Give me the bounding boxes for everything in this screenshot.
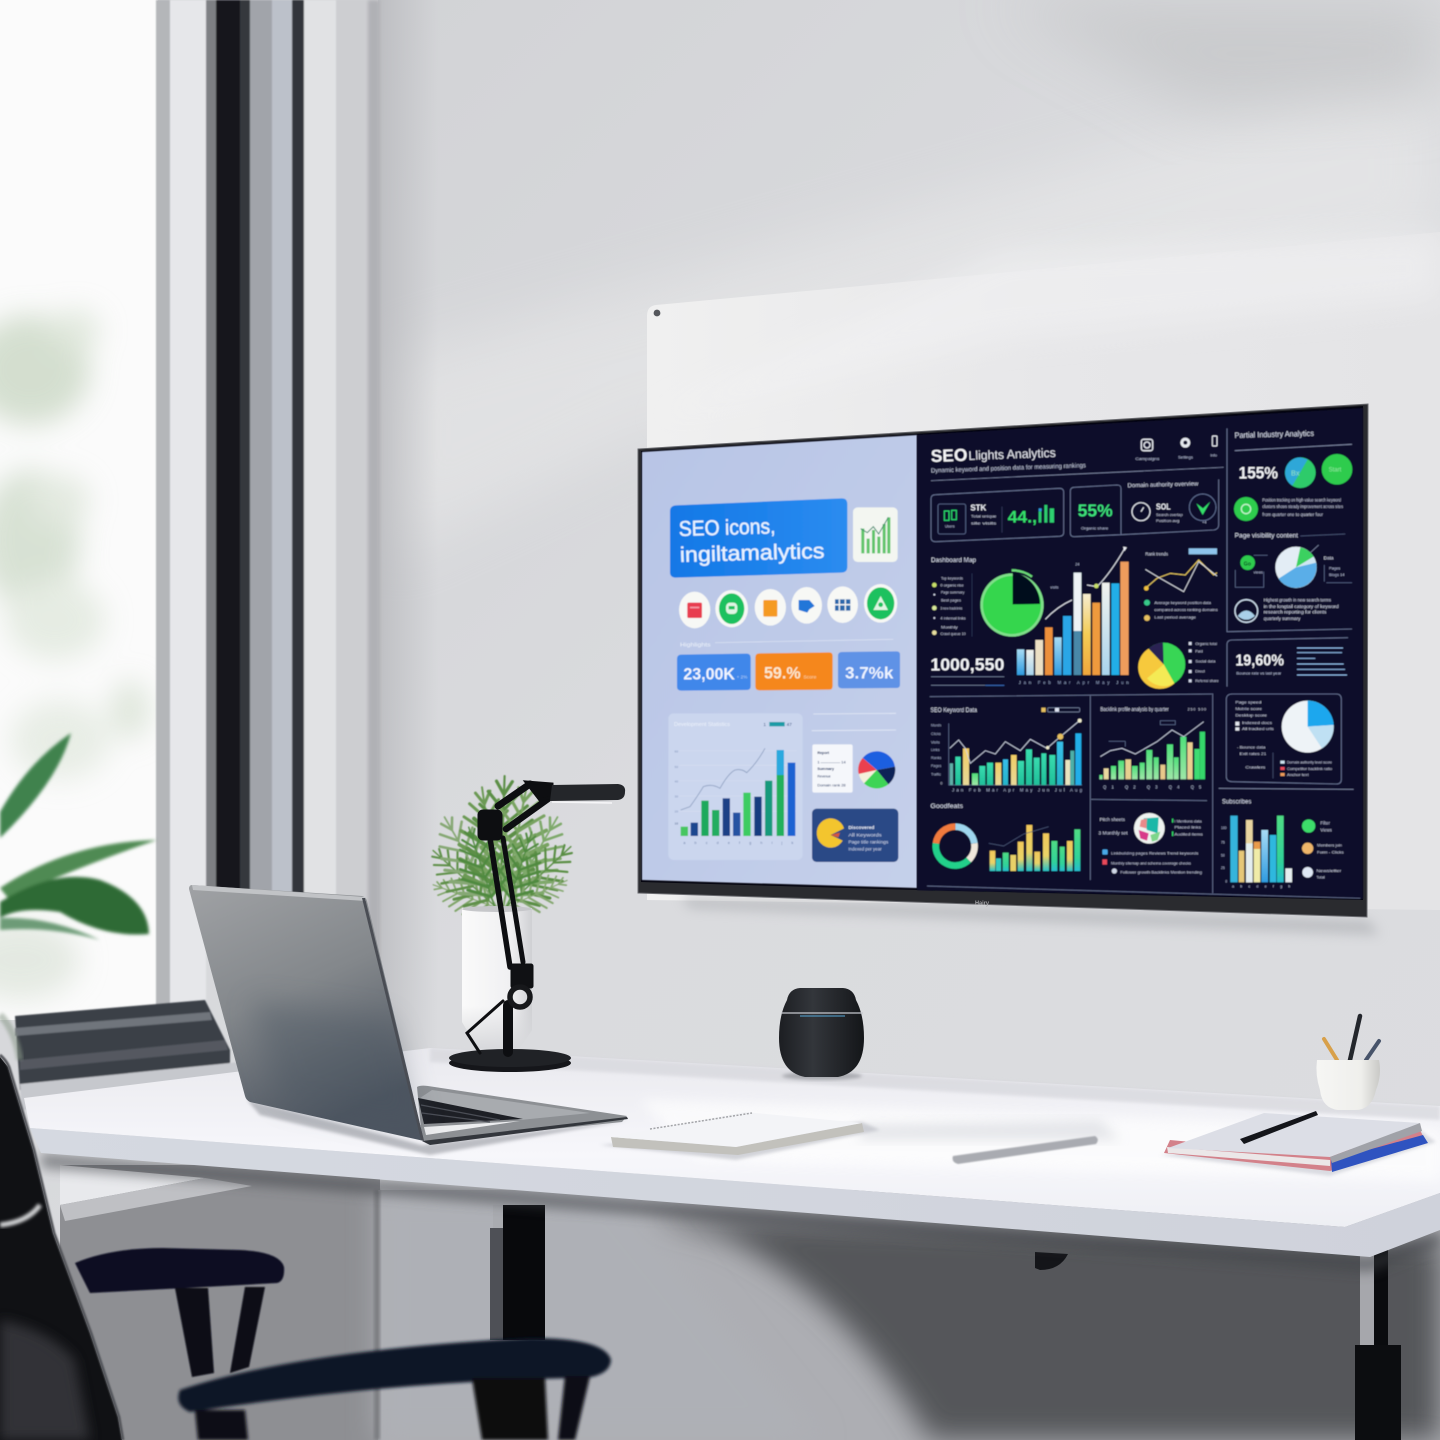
multi-colour pie chart [858, 751, 895, 788]
pencil cup [1316, 1016, 1380, 1110]
chart one axis labels: 0 [940, 782, 942, 786]
metric box: percent: 55% [1078, 501, 1113, 521]
chart one bars [950, 733, 1081, 785]
chart one axis labels: Clicks [931, 732, 941, 736]
icon: blue arrow [791, 587, 822, 624]
dark panel lower section [927, 693, 1360, 898]
separator lines [812, 713, 896, 731]
large total: 1000,550 [930, 655, 1004, 675]
pen on desk [953, 1136, 1098, 1164]
icon: gear: Settings [1178, 454, 1193, 459]
title line two: ingiltamalytics [679, 539, 825, 567]
metric box: users: Users [945, 524, 955, 528]
pie card: Exit rates 21 [1240, 751, 1267, 756]
dark panel lower section: 250 500 [1188, 708, 1206, 712]
green icon with text: clusters shows steady improvement across sites [1262, 504, 1343, 509]
desk [24, 1048, 1440, 1272]
pie card legend [1280, 761, 1285, 764]
line chart [1144, 548, 1218, 621]
pie card: Indexed docs [1242, 720, 1272, 725]
pie chart [1275, 545, 1319, 588]
left list with pie: visits [1050, 586, 1059, 590]
list legend: 4 internal links [940, 616, 966, 620]
bar chart trend line [1045, 547, 1125, 619]
chart one axis labels: Traffic [931, 773, 941, 777]
ring icon with text [1235, 597, 1339, 622]
green dot with bracket: views [1254, 570, 1263, 574]
yellow and green pie chart [1138, 642, 1219, 689]
icon: colour circle [1134, 813, 1165, 844]
monitor bezel [638, 404, 1368, 917]
KPI card orange: Score [803, 674, 817, 680]
subscribers bars: 0 [1225, 879, 1227, 883]
chart one x labels: Jan Feb Mar Apr May Jun Jul Aug [952, 787, 1083, 792]
list legend: Top keywords [941, 576, 963, 580]
KPI card blue: + 2% [737, 674, 747, 679]
KPI card orange: 59.% [764, 664, 801, 683]
ring icon with text: Highest growth in new search terms [1264, 597, 1331, 602]
pie legend: Paid [1195, 649, 1203, 653]
KPI card light blue [838, 651, 900, 688]
subscribers bars: 100 [1221, 826, 1227, 830]
left light panel [642, 435, 917, 888]
section heading: Dashboard Map [931, 557, 976, 564]
metric box: percent: Organic share [1081, 526, 1108, 530]
large total [930, 655, 1004, 685]
subscribers legend: Form - Clicks [1317, 849, 1344, 854]
speaker [779, 988, 864, 1080]
chair rear armrest [75, 1248, 284, 1377]
plant [418, 775, 587, 925]
green icon with text: from quarter one to quarter four [1262, 512, 1324, 517]
subscribers legend: Total [1316, 874, 1325, 879]
centre circle with list: 3 Monthly set [1098, 830, 1129, 835]
dashboard title: Llights Analytics [968, 446, 1056, 463]
chart two x labels: Q1 Q2 Q3 Q4 Q5 [1103, 785, 1202, 790]
mini list card [812, 744, 853, 793]
right column heading: Partial Industry Analytics [1234, 429, 1314, 440]
bar chart labels: Jan Feb Mar Apr May Jun [1019, 680, 1129, 685]
dashboard title: SEO [930, 445, 968, 466]
desk front edge [30, 1128, 1440, 1257]
pie legend [1324, 555, 1352, 583]
line chart: Average keyword position data [1154, 600, 1212, 605]
mini list card: Report [817, 751, 830, 755]
list legend: Best pages [941, 599, 961, 603]
line chart: Rank trends [1145, 552, 1168, 557]
large percentage: 155% [1239, 464, 1278, 483]
donut chart [936, 827, 975, 866]
title line one: SEO icons, [678, 514, 776, 541]
mini list card: 1 ————— 14 [817, 760, 846, 764]
green icon with text [1234, 497, 1343, 521]
navy summary card: All Keywords [848, 832, 882, 837]
subscribers legend: Views [1320, 827, 1332, 832]
title card [670, 498, 847, 578]
desk shadow [41, 1153, 1440, 1272]
chart card: 40 [675, 780, 678, 784]
chart icon card [853, 507, 898, 562]
pie legend: Social data [1195, 660, 1216, 664]
circle badge green: Start [1329, 467, 1342, 473]
list legend [932, 576, 966, 636]
navy summary card: Page title rankings [848, 840, 888, 845]
centre circle with list: I Mentions data [1174, 818, 1202, 823]
monitor shadow [680, 897, 1380, 935]
pie legend: Data [1324, 555, 1334, 560]
dashboard title [930, 445, 1086, 475]
subscribers bars [1221, 816, 1292, 888]
pale pie chart [1282, 701, 1334, 753]
chart one axis labels: Month [931, 724, 941, 728]
green dot with bracket [1235, 555, 1268, 587]
icon: green circle [715, 590, 748, 627]
chart one axis labels: Pages [931, 764, 942, 768]
laptop keyboard [418, 1098, 523, 1124]
icon: green letter [864, 584, 897, 623]
right dark panel [917, 408, 1363, 899]
metric box: users [931, 488, 1064, 542]
navy summary card: Discovered [848, 825, 874, 831]
x axis labels: a b c d e f g h i j k [683, 841, 794, 845]
icon: phone: Info [1210, 453, 1218, 458]
mini list card: Revenue [817, 774, 831, 778]
chart card: 50 [675, 765, 678, 769]
metrics label: Highlights [680, 643, 711, 649]
plant pot [462, 906, 532, 1048]
list legend: Monthly [941, 625, 958, 629]
subscribers legend [1302, 819, 1344, 879]
metric box: 19,60% [1227, 638, 1348, 687]
chart card: 30 [675, 794, 678, 798]
board pin [654, 310, 660, 316]
chart one axis labels [931, 723, 1082, 786]
metric box: score: SOL [1156, 502, 1171, 511]
chart two trend line [1100, 721, 1204, 757]
laptop shadow [247, 1100, 630, 1155]
icon: orange file [755, 589, 786, 626]
notebook on desk [600, 1112, 880, 1160]
under-desk bracket [1035, 1252, 1068, 1270]
list legend: Crawl queue 10 [940, 632, 966, 636]
metric box: score: Domain authority overview [1128, 481, 1199, 489]
pie card [1226, 694, 1341, 784]
icon: red badge [679, 592, 710, 628]
centre circle with list: Follower growth Backlinks Mention trending [1120, 870, 1202, 875]
window with blurred foliage [0, 0, 158, 1020]
green pie chart [980, 570, 1044, 637]
cup [1316, 1060, 1380, 1110]
metric box: score: Search overlap [1156, 513, 1183, 517]
centre circle with list: Monthly sitemap and schema coverage checks [1111, 860, 1191, 865]
right desk leg [1355, 1250, 1401, 1440]
chart card: 10 [675, 822, 678, 826]
monitor brand label: Hairy [975, 901, 990, 907]
subscribers bars: 50 [1221, 854, 1225, 858]
chair front armrest [178, 1338, 611, 1440]
left desk leg [490, 1205, 545, 1340]
green mini chart: 44., [1008, 508, 1037, 527]
subscribers bars: 75 [1221, 840, 1225, 844]
chart card [668, 713, 803, 860]
pie legend [1189, 642, 1219, 683]
navy summary card [812, 809, 898, 862]
line chart: Last period average [1154, 615, 1197, 620]
line chart: compared across ranking domains [1154, 607, 1218, 612]
metric box: score: +4 [1202, 519, 1207, 524]
chart card heading: Development Statistics [674, 722, 730, 728]
line chart legend [1144, 600, 1150, 606]
monitor [638, 404, 1368, 917]
centre circle with list: Audited items [1174, 832, 1203, 837]
chart two heading: Backlink profile analysis by quarter [1100, 707, 1169, 713]
lamp arm [467, 782, 552, 1053]
circle badge green [1322, 454, 1352, 485]
mounting board [647, 232, 1440, 910]
pie card text: Page speed [1235, 700, 1261, 705]
subscribers bars: a b c d e f g h [1232, 884, 1290, 888]
subscribers legend: Members join [1317, 843, 1342, 848]
laptop [189, 885, 630, 1155]
pen on notebook [1240, 1111, 1318, 1144]
laptop lid [189, 885, 424, 1141]
metric box: 19,60%: Bounce rate vs last year [1236, 671, 1282, 676]
dashboard subtitle: Dynamic keyword and position data for measuring rankings [931, 462, 1086, 475]
icon row [679, 584, 897, 628]
pie card: Anchor text [1287, 773, 1309, 777]
yellow and cyan bars [989, 825, 1080, 871]
bar chart [681, 750, 795, 836]
window sill [15, 1000, 240, 1110]
header icons [1135, 436, 1218, 461]
ring icon with text: in the longtail category of keyword [1264, 604, 1339, 609]
subscribers bars: 25 [1221, 866, 1225, 870]
main bar chart [1017, 547, 1129, 685]
yellow pie icon [817, 818, 844, 848]
pie card: All tracked urls [1242, 726, 1274, 731]
list legend: 3 new backlinks [940, 606, 962, 610]
chart one axis labels: Visits [931, 740, 940, 744]
icon: camera: Campaigns [1135, 456, 1159, 461]
metric box: percent [1070, 485, 1121, 537]
subsection heading: Page visibility content [1235, 533, 1298, 539]
pie card: Mobile score [1235, 706, 1263, 711]
metric box: score: Position avg [1156, 519, 1179, 523]
metric value: STK [970, 504, 987, 513]
ring icon with text: research reporting for clients [1264, 609, 1326, 614]
blurred window plant [0, 733, 157, 940]
chart card: 20 [675, 810, 678, 814]
pie card: - Bounce data [1237, 744, 1266, 749]
dark panel upper section [930, 428, 1352, 689]
icon: blue grid [827, 586, 858, 623]
donut heading: Goodfeats [930, 803, 963, 810]
chart card: 47 [787, 722, 792, 727]
ring icon with text: quarterly summary [1264, 616, 1301, 621]
laptop base [417, 1086, 627, 1142]
chart card: 1 [763, 722, 766, 727]
right column [1227, 428, 1352, 632]
chart axis labels: 60 [675, 750, 678, 754]
pie legend: Blogs 14 [1329, 572, 1345, 577]
office chair [0, 1015, 611, 1440]
left list with pie [931, 557, 1059, 637]
KPI card light blue: 3.7%k [845, 663, 894, 682]
lamp head [550, 784, 625, 803]
subscribers legend: Newsletter [1316, 868, 1342, 873]
window frame [156, 0, 380, 1060]
pie card: Desktop score [1235, 713, 1268, 718]
chart two bars [1099, 732, 1205, 779]
green icon with text: Position tracking on high-value search keyword [1262, 497, 1342, 502]
desk top [24, 1048, 1440, 1227]
pie card: Competitor backlink ratio [1287, 767, 1332, 771]
pie legend: Direct [1195, 670, 1205, 674]
wall shading under desk [60, 1165, 1440, 1440]
chart one heading: SEO Keyword Data [930, 707, 977, 714]
pie legend: Pages [1329, 565, 1340, 570]
trend line [681, 748, 765, 810]
subscribers heading: Subscribes [1222, 798, 1252, 805]
chart one axis labels: Links [931, 748, 940, 752]
notebook stack [1160, 1111, 1436, 1176]
mini list card: Domain rank 28 [817, 784, 846, 788]
centre circle with list: Pitch sheets [1100, 817, 1125, 822]
mini list card: Summary [817, 767, 835, 771]
metric box: score [1121, 479, 1219, 535]
pie card: Domain authority level score [1287, 761, 1332, 765]
circle badge blue: Bx [1291, 468, 1300, 477]
KPI card blue [677, 654, 751, 691]
metric box: 19,60%: 19,60% [1235, 652, 1284, 669]
KPI card blue: 23,00K [683, 664, 735, 683]
KPI card orange [755, 652, 833, 690]
centre circle with list: Linkbuilding pages Reviews Trend keywords [1111, 850, 1198, 855]
pie card: Crawlers [1245, 764, 1265, 769]
navy summary card: Indexed per year [848, 846, 882, 851]
chair back rest [0, 1057, 122, 1440]
main bar chart: 24 [1075, 562, 1079, 566]
chart one trend line [950, 719, 1082, 763]
green dot with bracket: Go [1244, 561, 1252, 567]
metric box: users: site visits [971, 521, 996, 526]
desk light [640, 1100, 1440, 1180]
chart one axis labels: Ranks [931, 756, 942, 760]
pencils [1324, 1016, 1379, 1060]
metric box: users: Total unique [971, 513, 997, 518]
subscribers legend: Filter [1320, 821, 1331, 826]
pie legend: Organic total [1195, 642, 1217, 646]
wall light shaft [378, 0, 1440, 1060]
pie legend: Referral share [1195, 679, 1219, 683]
lamp base [449, 1049, 571, 1072]
circle badge blue [1285, 457, 1316, 488]
centre circle with list: Placed links [1174, 824, 1201, 829]
centre circle with list [1098, 813, 1203, 875]
list legend: Page summary [941, 591, 965, 595]
list legend: 0 organic rise [940, 583, 964, 587]
desk lamp and plant [418, 775, 625, 1072]
